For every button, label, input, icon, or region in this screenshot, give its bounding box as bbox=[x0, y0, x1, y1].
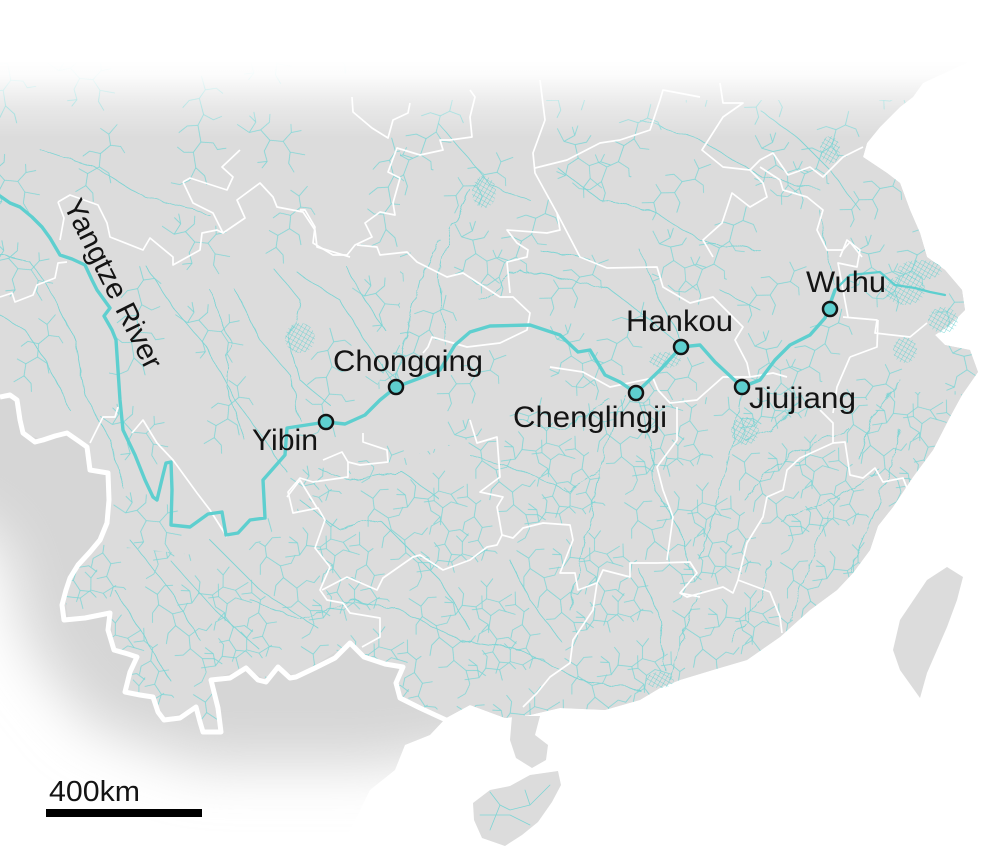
ocean bbox=[330, 40, 1000, 860]
province borders bbox=[0, 80, 927, 707]
city: Hankou: Hankou bbox=[626, 305, 733, 338]
delta section of the Yangtze bbox=[835, 272, 945, 295]
fade at top of map bbox=[0, 60, 1000, 138]
city: Wuhu: Wuhu bbox=[806, 266, 886, 299]
background: blurred grey surrounding land bbox=[0, 90, 1000, 765]
national border bbox=[0, 395, 446, 732]
city: Chenglingji: Chenglingji bbox=[513, 401, 667, 434]
Hainan tributaries bbox=[480, 785, 550, 830]
dense water patches bbox=[285, 136, 958, 688]
land: China mainland bbox=[0, 86, 978, 718]
island: Hainan bbox=[473, 771, 561, 846]
label: Yangtze River: Yangtze River bbox=[57, 194, 169, 375]
background tributaries: south, dense bbox=[60, 390, 1000, 720]
Yangtze River main channel bbox=[0, 196, 945, 535]
city: Chenglingji bbox=[513, 386, 667, 434]
island: Leizhou peninsula bbox=[510, 716, 548, 768]
background tributaries: north and east bbox=[330, 100, 1000, 480]
scale bar bbox=[46, 776, 202, 817]
island: Taiwan bbox=[893, 567, 963, 698]
top fade, white above bbox=[0, 0, 1000, 62]
hand-drawn major tributaries bbox=[0, 110, 900, 690]
city: Wuhu bbox=[806, 266, 886, 316]
scale label: 400km bbox=[49, 776, 140, 808]
city: Chongqing bbox=[333, 345, 483, 394]
city: Yibin bbox=[252, 415, 333, 457]
city: Jiujiang: Jiujiang bbox=[749, 382, 856, 415]
city: Yibin: Yibin bbox=[252, 424, 318, 457]
background tributaries: west, sparse bbox=[0, 60, 400, 560]
city: Chongqing: Chongqing bbox=[333, 345, 483, 378]
city: Hankou bbox=[626, 305, 733, 354]
